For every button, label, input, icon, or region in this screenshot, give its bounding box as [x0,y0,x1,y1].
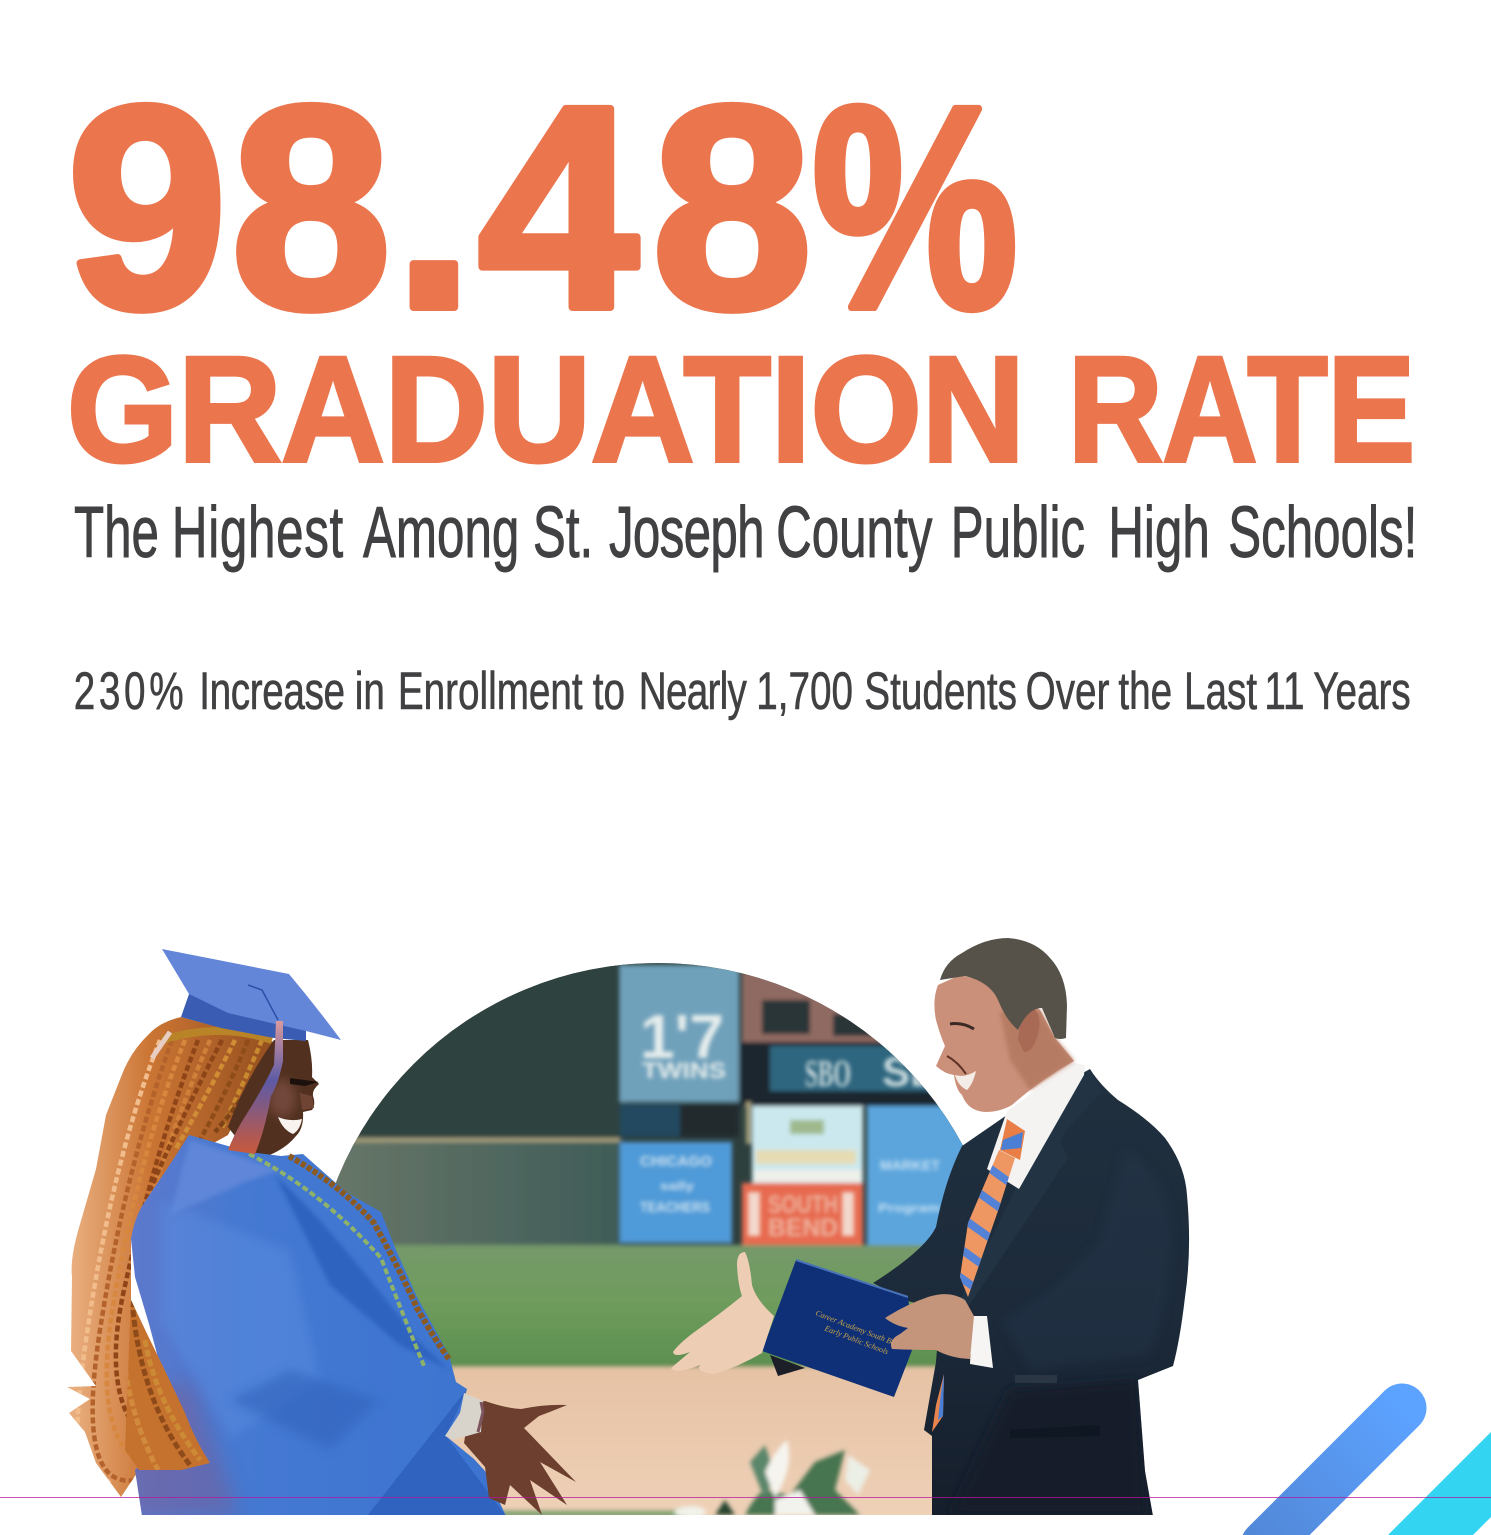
sign text: seventeen: CHICAGO [640,1153,712,1170]
sign text: seventeen: Program [878,1201,940,1215]
dress shirt collar [987,1063,1085,1189]
head and face [934,975,1074,1112]
short hair [940,938,1067,1039]
text: enrollment increase: Last [1184,661,1257,720]
face [228,1040,319,1158]
text: enrollment increase: 230% [74,661,187,720]
decorative blue diagonal bar [1265,1408,1402,1535]
hair: long orange braids [67,1017,274,1497]
sign text: seventeen: 1'7 [640,1003,724,1072]
footer rule line [0,1497,1491,1498]
diploma gold lettering: Early Public Schools [822,1323,890,1356]
diploma cover [762,1260,914,1397]
text: enrollment increase: 11 [1264,661,1305,720]
hand and bracelet [445,1393,576,1515]
subheading: highest among county schools: Among [363,493,519,573]
sign text: seventeen: MARKET [880,1157,940,1173]
gown [130,1135,506,1516]
subheading: highest among county schools: Highest [172,493,344,573]
text: enrollment increase: Increase [199,661,345,720]
subheading: highest among county schools: The [74,493,159,573]
text: enrollment increase: to [593,661,625,720]
sign text: seventeen: BEND [768,1214,838,1242]
subheading: highest among county schools: High [1108,493,1210,573]
headline: 98.48%: 98.48 [67,47,812,369]
open hand reaching for handshake [671,1252,774,1374]
honor cords [249,1154,449,1366]
suit jacket [873,1069,1189,1516]
sign text: seventeen [640,1003,940,1242]
text: enrollment increase: Years [1313,661,1411,720]
text: enrollment increase: in [355,661,385,720]
subheading: highest among county schools: St. [533,493,593,573]
decorative cyan diagonal bar [1388,1432,1491,1535]
flowers [674,1440,870,1518]
sign text: seventeen: SB [882,1048,940,1095]
hand holding diploma [885,1294,974,1359]
text: enrollment increase: Nearly [639,661,748,720]
graduate student in blue gown and cap [67,949,576,1516]
text: enrollment increase: 1,700 [756,661,853,720]
shirt cuff [970,1316,993,1368]
striped tie [932,1119,1025,1432]
heading: graduation rate: RATE [1068,325,1415,493]
text: enrollment increase: the [1118,661,1172,720]
sign text: seventeen: SBO [805,1053,851,1095]
graduation cap [162,949,341,1041]
photo background: baseball stadium in a circle [336,963,963,1515]
text: enrollment increase: Enrollment [398,661,583,720]
sign text: seventeen: sally [660,1179,694,1193]
text: enrollment increase: Over [1026,661,1109,720]
sign text: seventeen: TWINS [642,1058,726,1083]
hair: lower braids over gown [120,1300,210,1470]
principal in dark suit handing diploma [671,938,1189,1516]
diploma gold lettering: Career Academy South Bend [814,1308,905,1350]
headline: 98.48%: % [812,47,1018,369]
sign text: seventeen: TEACHERS [640,1199,710,1216]
subheading: highest among county schools: Schools! [1228,493,1417,573]
heading: graduation rate: GRADUATION [67,325,1025,493]
text: enrollment increase: Students [864,661,1017,720]
sign text: seventeen: SOUTH [768,1191,838,1219]
subheading: highest among county schools: Joseph [609,493,764,573]
tassel [228,1021,283,1154]
subheading: highest among county schools: Public [951,493,1085,573]
subheading: highest among county schools: County [776,493,932,573]
